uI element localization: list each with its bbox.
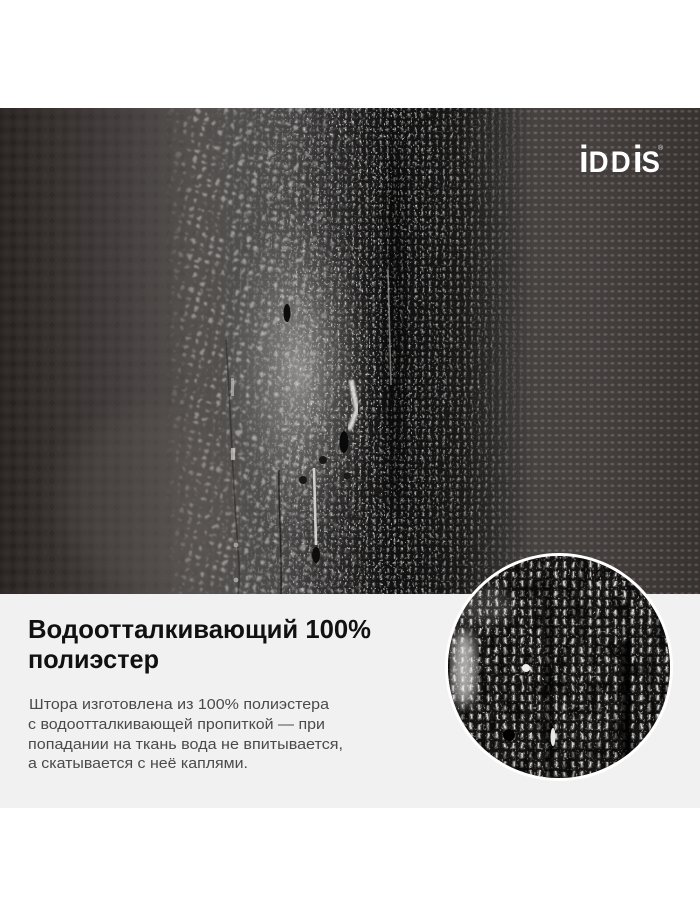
circular close-up of fabric <box>445 553 673 781</box>
water streaks and drops <box>226 270 391 594</box>
logo: iddis: i <box>633 138 643 180</box>
bottom information panel <box>0 594 700 808</box>
title <box>28 614 371 674</box>
logo: iddis <box>579 138 664 180</box>
infographic canvas <box>0 108 700 808</box>
logo: iddis: ® <box>658 144 664 152</box>
description text <box>28 696 343 772</box>
description text: а скатывается с неё каплями. <box>28 755 248 772</box>
description text: Штора изготовлена из 100% полиэстера <box>29 696 330 713</box>
description text: попадании на ткань вода не впитывается, <box>28 736 343 753</box>
description text: с водоотталкивающей пропиткой — при <box>28 716 325 733</box>
title: полиэстер <box>28 644 159 674</box>
logo: iddis: i <box>579 138 589 180</box>
logo: iddis: D <box>589 146 609 179</box>
photo: dark curtain fabric with water drops <box>0 108 700 594</box>
logo: iddis: S <box>642 146 660 179</box>
logo: iddis: D <box>611 146 631 179</box>
title: Водоотталкивающий 100% <box>28 614 371 644</box>
